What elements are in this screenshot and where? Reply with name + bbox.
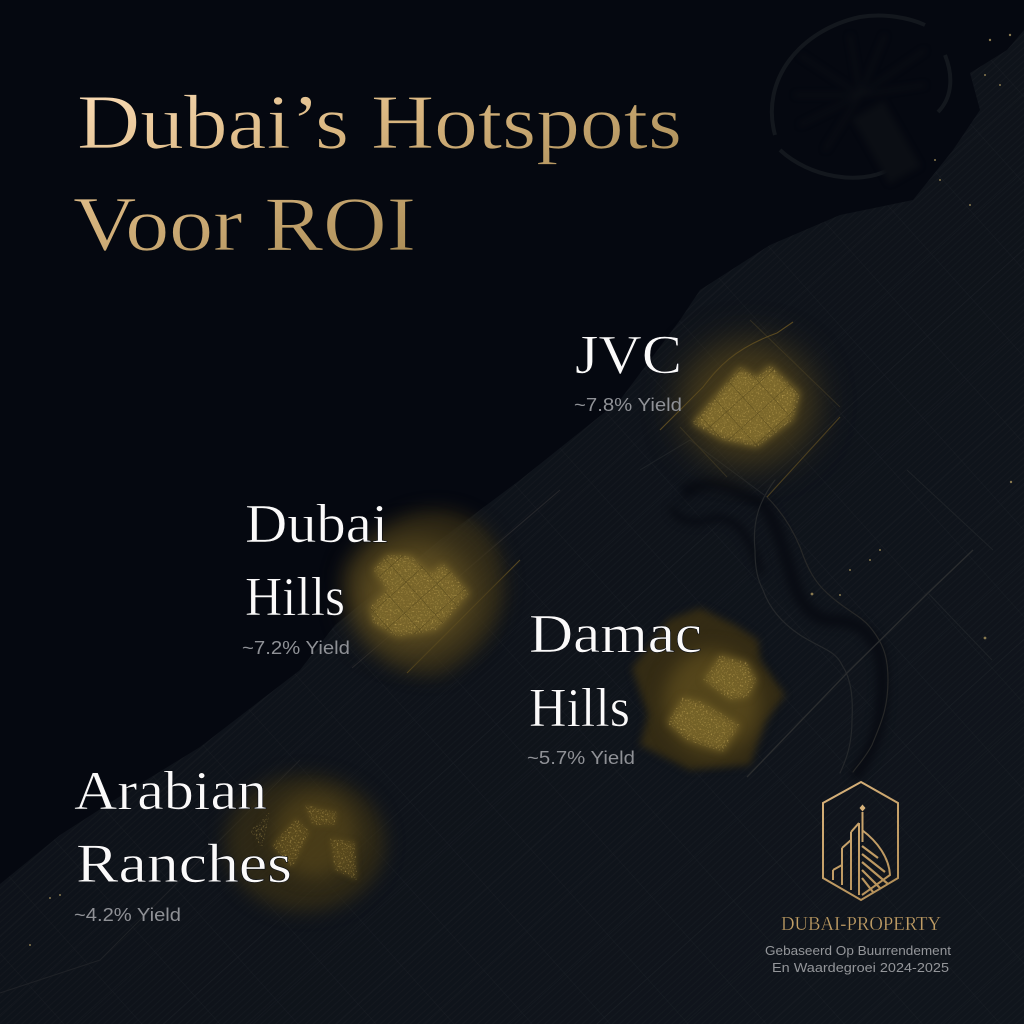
label: JVC [574, 324, 682, 415]
source note: En Waardegroei 2024-2025 [772, 961, 949, 975]
label: Damac Hills: ~5.7% Yield [527, 748, 635, 768]
label: Arabian Ranches: Arabian [74, 760, 267, 821]
source note: Gebaseerd Op Buurrendement [765, 944, 952, 958]
label: Dubai Hills: ~7.2% Yield [242, 638, 350, 658]
hotspot glow: Arabian Ranches [225, 775, 385, 911]
source note [765, 944, 952, 975]
label: JVC: JVC [575, 324, 682, 385]
map: main roads [0, 320, 993, 993]
label: JVC: ~7.8% Yield [574, 395, 682, 415]
label: Arabian Ranches: ~4.2% Yield [74, 905, 181, 925]
logo wordmark: DUBAI-PROPERTY [781, 913, 941, 935]
label: Arabian Ranches: Ranches [76, 833, 292, 894]
label: Dubai Hills: Hills [245, 566, 345, 627]
label: Damac Hills [527, 603, 702, 768]
label: Damac Hills: Hills [529, 677, 630, 738]
label: Dubai Hills: Dubai [245, 493, 388, 554]
hotspot glow: Dubai Hills [345, 510, 505, 675]
hotspot glow: Damac Hills [632, 608, 785, 770]
map: palm island [772, 16, 950, 178]
hotspot glow: JVC [680, 341, 816, 465]
label: Damac Hills: Damac [529, 603, 702, 664]
label: Dubai Hills [242, 493, 388, 658]
map: creek [673, 480, 888, 773]
title: Dubai’s Hotspots [77, 79, 682, 165]
label: Arabian Ranches [74, 760, 292, 925]
logo: Dubai Property emblem [823, 782, 898, 900]
title: Voor ROI [73, 181, 416, 267]
title [73, 79, 682, 267]
